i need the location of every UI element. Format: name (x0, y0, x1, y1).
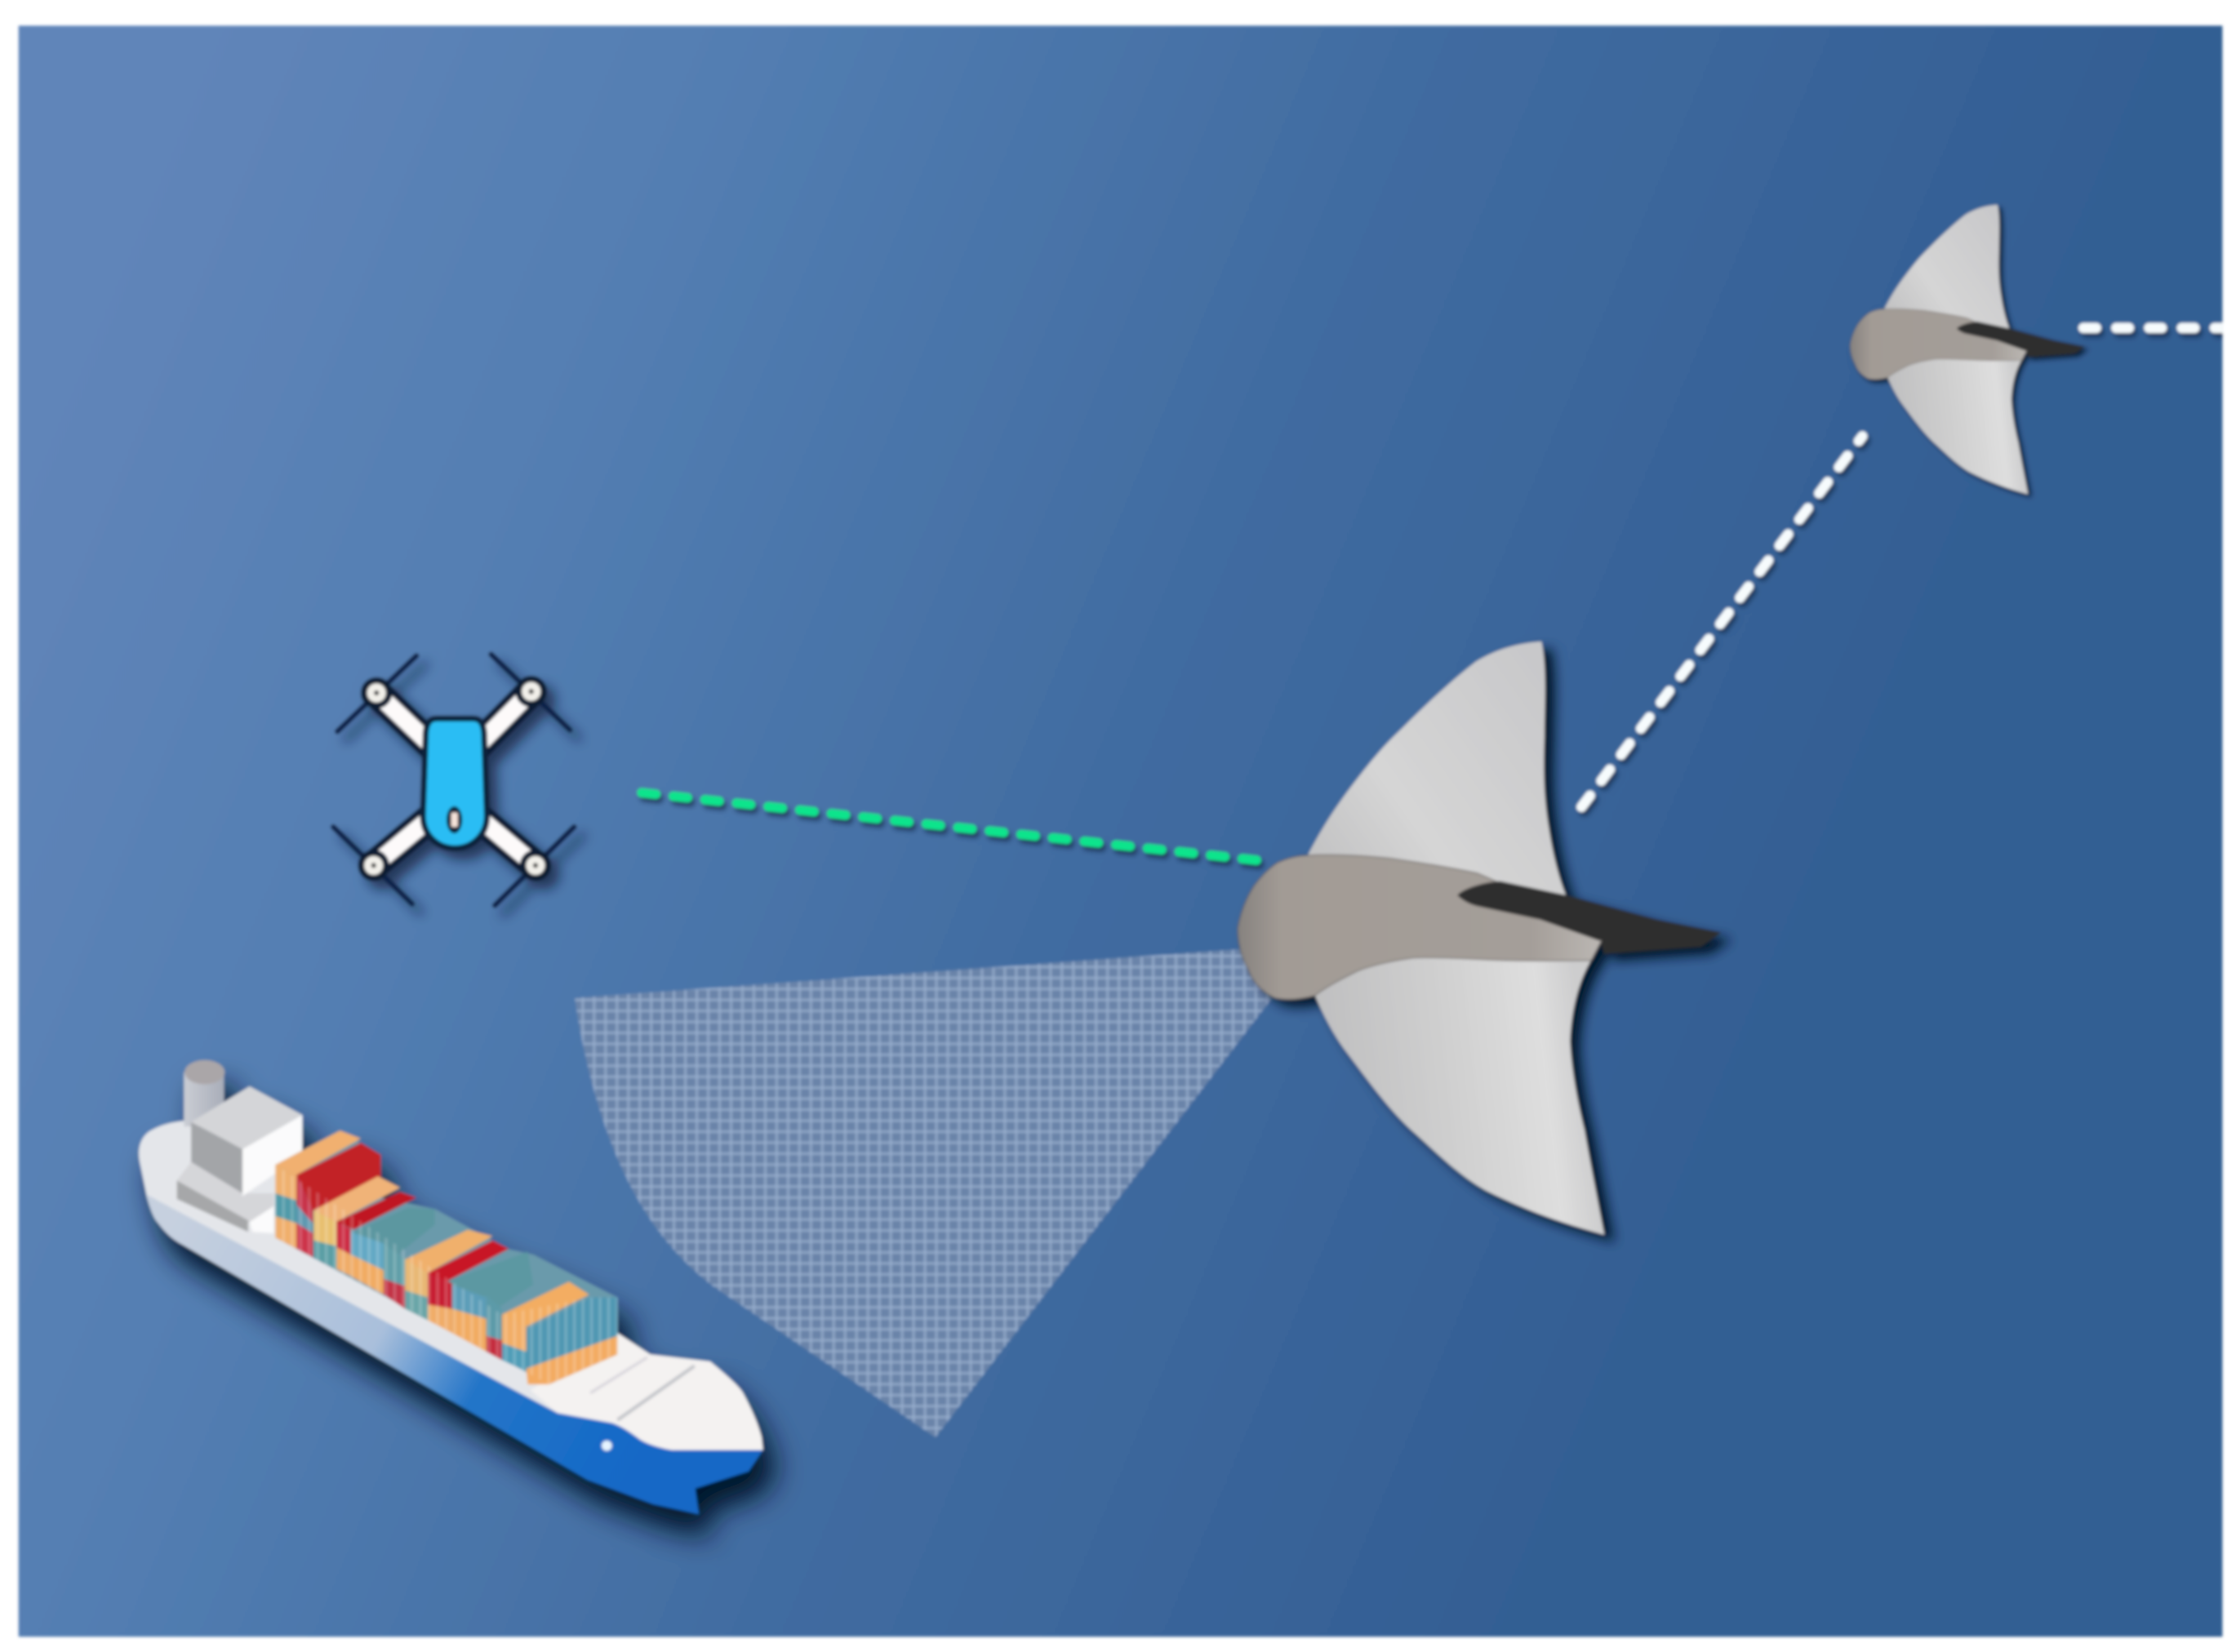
drone propellers (333, 655, 574, 905)
bridge block top (191, 1086, 302, 1149)
drone camera (447, 806, 462, 833)
bow orange lower band (527, 1336, 617, 1384)
second orange container tops (313, 1176, 400, 1222)
lower superstructure top (177, 1162, 273, 1223)
small manta tail (1957, 322, 2085, 357)
teal stack midship (353, 1208, 435, 1255)
bow deck line (617, 1366, 695, 1420)
drone camera lens (451, 813, 458, 827)
large manta body (1238, 855, 1602, 1000)
drone hub centres (371, 689, 538, 868)
third orange container tops (405, 1230, 492, 1273)
large manta upper wing (1308, 642, 1566, 895)
large manta lower wing (1315, 953, 1604, 1235)
large manta robot (1238, 642, 1721, 1235)
teal stack aft of bow (447, 1252, 533, 1312)
ship bow deck (531, 1333, 763, 1450)
drone arms (374, 691, 536, 865)
bridge block grey face (191, 1122, 242, 1193)
icon: quadcopter drone (333, 655, 574, 905)
funnel body (184, 1072, 224, 1126)
small manta lower wing (1887, 357, 2028, 494)
small manta upper wing (1884, 205, 2009, 329)
small manta dorsal stripe (1957, 322, 2026, 351)
large manta tail (1457, 882, 1721, 954)
white link to small manta (1581, 437, 1862, 807)
container ship (139, 1060, 763, 1514)
stern red containers (296, 1143, 380, 1210)
ship hull (140, 1162, 763, 1514)
container stacks (275, 1130, 617, 1384)
container side faces (275, 1165, 527, 1371)
container corrugation overlay (275, 1165, 617, 1384)
bow teal container block (527, 1298, 617, 1369)
large manta dorsal stripe (1457, 882, 1600, 941)
ship porthole (602, 1441, 612, 1451)
drone body (423, 718, 487, 848)
sonar scan sector (575, 948, 1272, 1437)
container base (275, 1130, 617, 1384)
ship funnel (184, 1060, 224, 1126)
bridge block white face (242, 1115, 302, 1197)
second red containers (336, 1192, 416, 1230)
stern orange container tops (275, 1130, 361, 1175)
white link leaving to the right (2083, 325, 2222, 331)
forward hatch line (590, 1357, 647, 1393)
lower superstructure grey side (177, 1180, 248, 1232)
funnel cap (184, 1060, 224, 1084)
third red containers (427, 1241, 509, 1281)
drone rotor hubs (361, 679, 548, 878)
green optical link (642, 793, 1265, 861)
small manta robot (1850, 205, 2085, 494)
lower superstructure white side (250, 1206, 273, 1233)
small manta body (1850, 309, 2026, 380)
ship deck (139, 1121, 763, 1450)
bow orange container tops (502, 1281, 589, 1327)
